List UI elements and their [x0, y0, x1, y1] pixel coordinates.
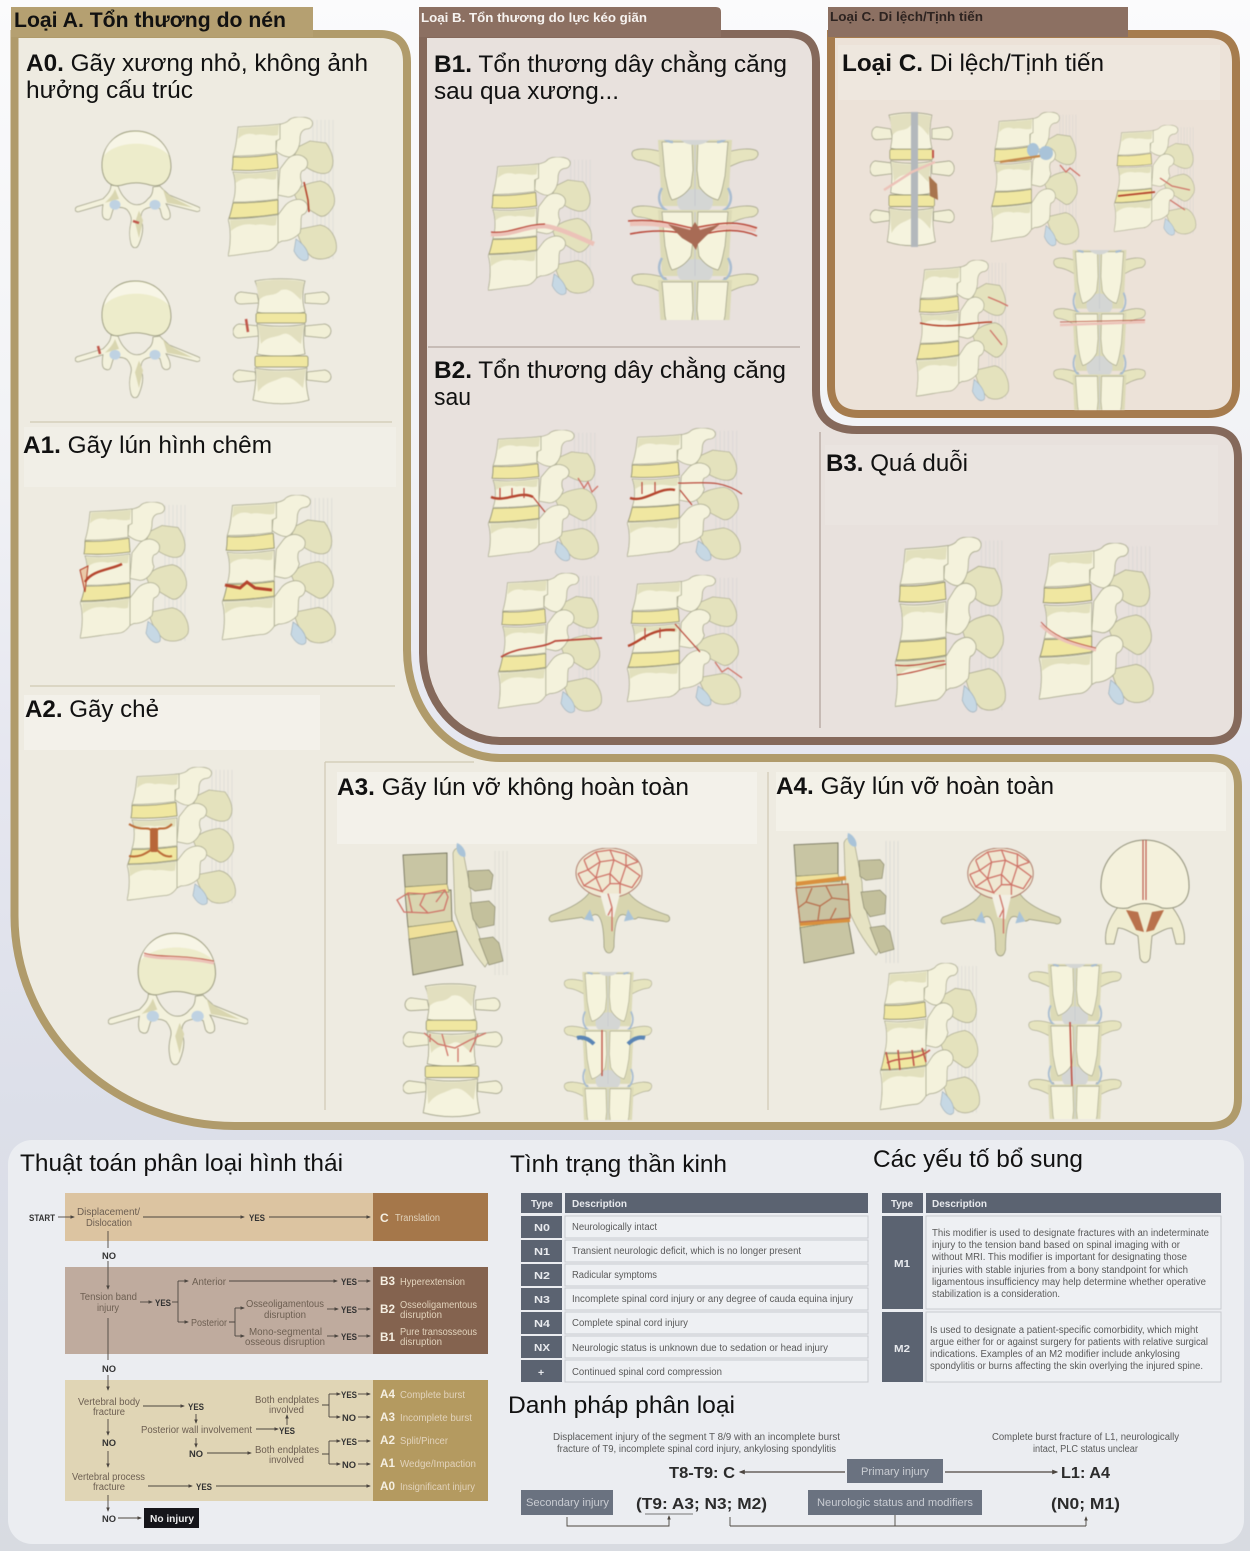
row M1: stabilization is a consideration. [932, 1289, 1060, 1300]
label: type B: Loại B. Tổn thương do lực kéo giãn [421, 11, 647, 25]
example description right: Complete burst fracture of L1, neurologically [992, 1432, 1179, 1443]
example description left: Displacement injury of the segment T 8/9 with an incomplete burst [553, 1432, 840, 1443]
title background A3 [337, 772, 757, 844]
flowchart decision labels: osseous disruption [245, 1337, 325, 1348]
row NX: NX [534, 1342, 550, 1354]
panel: bottom reference area [8, 1140, 1244, 1544]
flowchart decision labels: NO [102, 1514, 116, 1525]
box: neurologic status and modifiers [808, 1490, 982, 1515]
flowchart decision labels: START [29, 1213, 55, 1224]
bracket: modifiers [730, 1515, 1086, 1526]
flowchart outcome labels: B2 [380, 1302, 395, 1316]
label: type C: Loại C. Di lệch/Tịnh tiến [830, 10, 983, 24]
flowchart decision labels: NO [102, 1364, 116, 1375]
row M2 [882, 1312, 1221, 1382]
flowchart decision labels: Displacement/ [77, 1207, 140, 1218]
flowchart outcome labels: B1 [380, 1330, 395, 1344]
flowchart outcome labels: Incomplete burst [400, 1413, 472, 1424]
flowchart decision labels: Both endplates [255, 1445, 319, 1456]
row M2: indications. Examples of an M2 modifier include ankylosing [930, 1349, 1180, 1360]
example description left [553, 1432, 840, 1455]
illustrations A0 [75, 117, 336, 404]
flowchart decision labels: Mono-segmental [249, 1327, 322, 1338]
row N4: N4 [534, 1318, 550, 1330]
flowchart outcome labels: Complete burst [400, 1390, 465, 1401]
flowchart decision labels: involved [269, 1455, 304, 1466]
row N2 [521, 1264, 868, 1286]
title background C [838, 45, 1220, 100]
row N3: N3 [534, 1294, 550, 1306]
heading: morphology algorithm: Thuật toán phân loại hình thái [20, 1150, 343, 1177]
flowchart decision labels: disruption [264, 1310, 306, 1321]
row plus: + [538, 1367, 544, 1379]
box: primary injury: Primary injury [861, 1466, 930, 1478]
row plus [521, 1360, 868, 1382]
flowchart outcome labels: Osseoligamentous [400, 1300, 477, 1311]
illustrations B1 [488, 70, 758, 355]
flowchart decision labels: YES [279, 1426, 295, 1437]
flowchart outcome labels: B3 [380, 1274, 395, 1288]
title background A1 [24, 427, 396, 487]
flowchart decision labels: Both endplates [255, 1395, 319, 1406]
heading C: Loại C. Di lệch/Tịnh tiến [842, 50, 1104, 77]
heading B1: sau qua xương... [434, 78, 619, 105]
row N0: Neurologically intact [572, 1222, 657, 1233]
box: primary injury [847, 1459, 943, 1483]
row M1: This modifier is used to designate fractures with an indeterminate [932, 1228, 1209, 1239]
code L1: L1: A4 [1061, 1465, 1110, 1482]
row N1 [521, 1240, 868, 1262]
row M2: argue either for or against surgery for patients with relative surgical [930, 1337, 1208, 1348]
heading B1 [434, 51, 787, 105]
flowchart decision labels: YES [341, 1277, 357, 1288]
flowchart decision labels: Osseoligamentous [246, 1299, 324, 1310]
flowchart decision labels: Posterior [191, 1318, 228, 1329]
flowchart outcome labels [380, 1211, 477, 1493]
title background A4 [776, 772, 1226, 831]
heading A0: A0. Gãy xương nhỏ, không ảnh [26, 50, 368, 77]
flowchart decision labels: NO [102, 1438, 116, 1449]
flowchart outcome labels: A0 [380, 1479, 395, 1493]
flowchart decision labels: Dislocation [86, 1218, 132, 1229]
row N4 [521, 1312, 868, 1334]
example description right: intact, PLC status unclear [1033, 1444, 1139, 1455]
row NX [521, 1336, 868, 1358]
table header: Type [891, 1198, 913, 1210]
flowchart outcome labels: A4 [380, 1387, 395, 1401]
table header: Type [531, 1198, 553, 1210]
flowchart outcome labels: A3 [380, 1410, 395, 1424]
table header: Description [932, 1198, 987, 1210]
flowchart: morphology classification [29, 1193, 488, 1528]
panel: type C translation injuries [828, 7, 1236, 414]
illustrations A1 [80, 495, 335, 644]
flowchart decision labels: YES [155, 1298, 171, 1309]
flowchart decision labels: Vertebral process [72, 1472, 145, 1483]
box: secondary injury [521, 1490, 613, 1515]
row N4: Complete spinal cord injury [572, 1318, 688, 1329]
arrow to T8-T9 [740, 1471, 845, 1473]
heading: neurologic status: Tình trạng thần kinh [510, 1151, 727, 1178]
table header [521, 1193, 868, 1213]
flowchart decision labels: YES [196, 1482, 212, 1493]
flowchart decision labels: involved [269, 1405, 304, 1416]
example description right [992, 1432, 1179, 1455]
row N3 [521, 1288, 868, 1310]
illustrations A2 [108, 767, 248, 1065]
outcome: no injury: No injury [150, 1513, 194, 1525]
row: translation [65, 1193, 488, 1241]
flowchart outcome labels: C [380, 1211, 389, 1225]
table: neurologic status [521, 1193, 868, 1382]
flowchart decision labels: Posterior wall involvement [141, 1425, 252, 1436]
outcome: no injury [144, 1508, 199, 1528]
illustrations C [870, 112, 1196, 441]
row M1: injuries with stable injuries from a bony standpoint for which [932, 1265, 1188, 1276]
flowchart decision labels: YES [188, 1402, 204, 1413]
flowchart outcome labels: Pure transosseous [400, 1327, 477, 1338]
heading A1: A1. Gãy lún hình chêm [23, 432, 272, 459]
heading A0 [26, 50, 368, 104]
label: type A: Loại A. Tổn thương do nén [14, 9, 286, 32]
flowchart outcome labels: Hyperextension [400, 1277, 465, 1288]
row N0 [521, 1216, 868, 1238]
flowchart decision labels: YES [341, 1390, 357, 1401]
example description left: fracture of T9, incomplete spinal cord injury, ankylosing spondylitis [557, 1444, 836, 1455]
heading B1: B1. Tổn thương dây chằng căng [434, 51, 787, 78]
flowchart arrows [58, 1217, 370, 1518]
table header [882, 1193, 1221, 1213]
heading A4: A4. Gãy lún vỡ hoàn toàn [776, 773, 1054, 800]
panel: type B distraction injuries [419, 7, 1238, 741]
row: tension band [65, 1267, 488, 1354]
flowchart decision labels: YES [341, 1437, 357, 1448]
flowchart decision labels: NO [342, 1460, 356, 1471]
flowchart decision labels: Anterior [192, 1277, 227, 1288]
row M1 [882, 1216, 1221, 1309]
illustrations A3 [397, 843, 670, 1149]
heading B2: sau [434, 384, 471, 411]
flowchart decision labels: NO [102, 1251, 116, 1262]
flowchart decision labels: injury [97, 1303, 119, 1314]
icon: superior view with sagittal fracture [1101, 840, 1189, 962]
illustrations B2 [488, 428, 742, 713]
row M2: Is used to designate a patient-specific comorbidity, which might [930, 1325, 1198, 1336]
flowchart decision labels: NO [189, 1449, 203, 1460]
flowchart decision labels: fracture [93, 1482, 125, 1493]
flowchart outcome labels: Translation [395, 1213, 440, 1224]
table: modifiers [882, 1193, 1221, 1382]
arrow to L1 [945, 1471, 1057, 1473]
title background A2 [24, 695, 320, 750]
code T8-T9: T8-T9: C [669, 1465, 735, 1482]
flowchart outcome labels: Insignificant injury [400, 1482, 475, 1493]
flowchart outcome labels: A2 [380, 1433, 395, 1447]
flowchart decision labels: YES [341, 1332, 357, 1343]
diagram: nomenclature examples [521, 1432, 1179, 1526]
row NX: Neurologic status is unknown due to sedation or head injury [572, 1343, 828, 1354]
flowchart decision labels: Vertebral body [78, 1397, 140, 1408]
flowchart outcome labels: disruption [400, 1310, 442, 1321]
code T9: (T9: A3; N3; M2) [636, 1496, 767, 1513]
heading B3: B3. Quá duỗi [826, 450, 968, 477]
row M1: without MRI. This modifier is important for designating those [931, 1252, 1187, 1263]
tab: type C [828, 7, 1128, 37]
row M1: ligamentous insufficiency may help determine whether operative [932, 1277, 1206, 1288]
row M1: injury to the tension band based on spinal imaging with or [932, 1240, 1181, 1251]
flowchart decision labels: fracture [93, 1407, 125, 1418]
row N2: Radicular symptoms [572, 1270, 657, 1281]
row M1: M1 [894, 1258, 910, 1270]
flowchart decision labels [29, 1207, 357, 1525]
table header: Description [572, 1198, 627, 1210]
illustrations A4 [794, 833, 1189, 1149]
code N0 M1: (N0; M1) [1051, 1496, 1120, 1513]
flowchart outcome labels: disruption [400, 1337, 442, 1348]
heading A3: A3. Gãy lún vỡ không hoàn toàn [337, 774, 689, 801]
flowchart decision labels: Tension band [80, 1292, 137, 1303]
row: compression [65, 1380, 488, 1501]
row plus: Continued spinal cord compression [572, 1367, 722, 1378]
row N2: N2 [534, 1270, 550, 1282]
heading A2: A2. Gãy chẻ [25, 696, 159, 723]
box: neurologic status and modifiers: Neurologic status and modifiers [817, 1497, 974, 1509]
row N1: N1 [534, 1246, 550, 1258]
title background B3 [825, 445, 1218, 525]
panel: type A compression injuries [11, 7, 1238, 1126]
row N0: N0 [534, 1222, 550, 1234]
flowchart decision labels: YES [341, 1305, 357, 1316]
illustrations B3 [895, 537, 1153, 712]
flowchart outcome labels: Split/Pincer [400, 1436, 449, 1447]
bracket: secondary injury [567, 1514, 693, 1526]
heading A0: hưởng cấu trúc [26, 77, 193, 104]
tab: type B [419, 7, 721, 37]
flowchart decision labels: NO [342, 1413, 356, 1424]
box: secondary injury: Secondary injury [526, 1497, 609, 1509]
row N1: Transient neurologic deficit, which is no longer present [572, 1246, 801, 1257]
heading B2: B2. Tổn thương dây chằng căng [434, 357, 786, 384]
heading: additional modifiers: Các yếu tố bổ sung [873, 1146, 1083, 1173]
flowchart outcome labels: Wedge/Impaction [400, 1459, 476, 1470]
heading: classification nomenclature: Danh pháp phân loại [508, 1392, 735, 1419]
row M2: M2 [894, 1343, 910, 1355]
tab: type A [11, 7, 313, 37]
flowchart outcome labels: A1 [380, 1456, 395, 1470]
row M2: spondylitis or burns affecting the skin overlying the injured spine. [930, 1361, 1203, 1372]
flowchart decision labels: YES [249, 1213, 265, 1224]
heading B2 [434, 357, 786, 411]
row N3: Incomplete spinal cord injury or any degree of cauda equina injury [572, 1294, 853, 1305]
